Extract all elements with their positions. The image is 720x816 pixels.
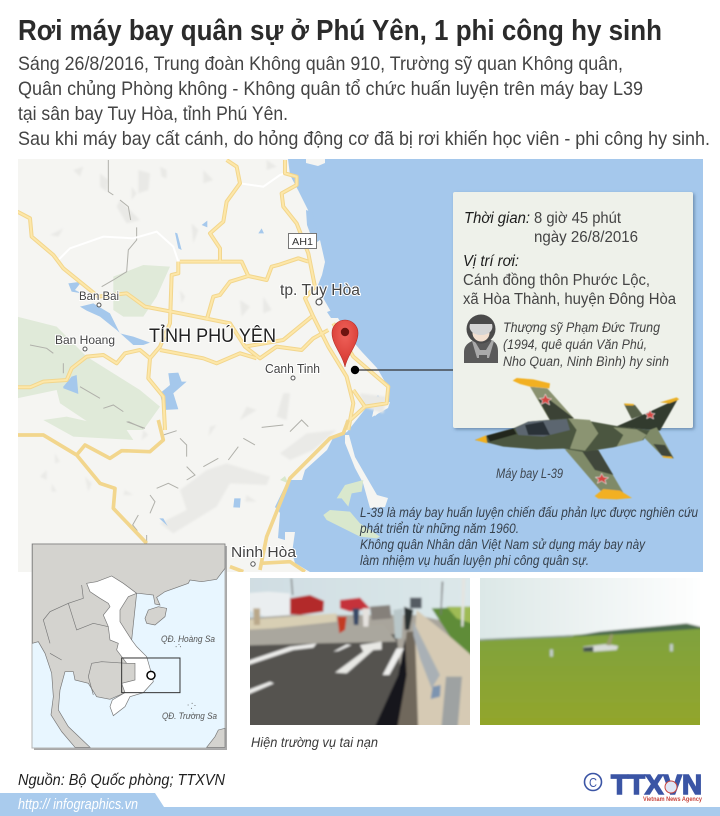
map sandbar: [306, 159, 390, 508]
map lagoon: [306, 210, 338, 318]
map label: Tuy Hoa: tp. Tuy Hòa: [280, 282, 360, 299]
crash location: Cánh đồng thôn Phước Lộc,: [463, 272, 650, 289]
map label: Ban Bai: Ban Bai: [79, 289, 119, 303]
aircraft caption: Máy bay L-39: [496, 466, 563, 481]
Vietnam: [87, 576, 153, 716]
connector line from crash site to info box: [351, 366, 454, 374]
far tailplane: [624, 404, 643, 419]
panel: incident info: [453, 192, 693, 428]
map forest areas: [17, 265, 170, 440]
map terrain shading: [50, 160, 387, 420]
website url: http:// infographics.vn: [18, 797, 138, 813]
photo: wreck in the rice field: [480, 578, 700, 725]
aircraft description: phát triển từ những năm 1960.: [359, 521, 519, 536]
footer band with url tab: [0, 793, 720, 816]
crash site marker: [147, 671, 155, 679]
icon: pilot: [464, 314, 498, 363]
Borneo corner: [207, 728, 225, 747]
map islands: [280, 476, 380, 538]
pilot caption: Thượng sỹ Phạm Đức Trung: [503, 320, 660, 335]
aircraft description: Không quân Nhân dân Việt Nam sử dụng máy bay này: [360, 537, 646, 552]
map label: Canh Tinh: Canh Tinh: [265, 362, 320, 376]
near tailplane: [640, 427, 674, 459]
intro text block: Sáng 26/8/2016, Trung đoàn Không quân 910, Trường sỹ quan Không quân,: [18, 53, 623, 75]
label: Truong Sa: QĐ. Trường Sa: [162, 711, 217, 722]
photo caption: Hiện trường vụ tai nạn: [251, 735, 378, 750]
source: Nguồn: Bộ Quốc phòng; TTXVN: [18, 772, 225, 789]
Hainan: [145, 607, 167, 625]
title: Rơi máy bay quân sự ở Phú Yên, 1 phi công hy sinh: [18, 15, 662, 47]
map minor roads south: [127, 420, 308, 543]
map label: Ninh Hoa: Ninh Hòa: [231, 544, 297, 561]
map land: [18, 159, 388, 572]
photo: crash scene on the road: [250, 578, 470, 725]
map sea: [275, 159, 703, 572]
map minor roads: [30, 160, 143, 428]
map label: Ban Hoang: Ban Hoang: [55, 333, 115, 347]
logo: TTXVN: [584, 769, 702, 803]
wordmark: TTXVN: [611, 769, 702, 800]
time: Thời gian:: [464, 210, 530, 227]
map white roads: [58, 173, 285, 262]
crash location: Vị trí rơi:: [463, 253, 519, 270]
area of interest frame: [122, 658, 180, 693]
fuselage: [475, 418, 650, 452]
borders: [43, 585, 127, 695]
time: [464, 210, 638, 246]
road shield AH1: AH1: [292, 236, 313, 248]
image: L-39 aircraft: [475, 378, 679, 499]
panel: locator map: [32, 544, 227, 750]
upper wing: [530, 387, 574, 421]
globe: [665, 781, 677, 793]
locator frame shadow: [34, 546, 227, 750]
nose and tip tanks: [475, 435, 487, 443]
cockpit: [515, 419, 570, 437]
time: ngày 26/8/2016: [534, 229, 638, 246]
panel: location map: [17, 159, 703, 572]
map label: province: TỈNH PHÚ YÊN: [149, 324, 276, 347]
crash location: xã Hòa Thành, huyện Đông Hòa: [463, 291, 676, 308]
aircraft description: làm nhiệm vụ huấn luyện phi công quân sự.: [360, 553, 589, 568]
vertical tail: [616, 398, 678, 431]
agency name: Vietnam News Agency: [643, 796, 702, 803]
copyright mark: C: [589, 775, 597, 790]
map small ponds south: [159, 498, 241, 526]
locator land: [32, 544, 225, 747]
islands dots: [176, 644, 195, 708]
intro text block: Quân chủng Phòng không - Không quân tổ chức huấn luyện trên máy bay L39: [18, 78, 643, 100]
label: Hoang Sa: QĐ. Hoàng Sa: [161, 634, 215, 645]
map lakes: [63, 221, 264, 410]
time: 8 giờ 45 phút: [534, 210, 622, 227]
aircraft description: [359, 505, 698, 568]
lower wing: [565, 449, 627, 498]
intro text block: [18, 53, 710, 150]
intro text block: tại sân bay Tuy Hòa, tỉnh Phú Yên.: [18, 103, 288, 125]
pilot caption: [503, 320, 669, 369]
road shield AH1: [288, 234, 316, 248]
icon: map pin: [332, 320, 358, 367]
pilot caption: (1994, quê quán Văn Phú,: [503, 337, 647, 352]
red stars: [539, 394, 655, 484]
map terrain shading south: [40, 425, 337, 533]
info box background: [453, 192, 693, 428]
map main roads: [17, 160, 388, 430]
map main roads south: [17, 420, 348, 572]
locator sea: [32, 544, 225, 748]
crash location: [463, 253, 676, 308]
pilot caption: Nho Quan, Ninh Bình) hy sinh: [503, 354, 669, 369]
